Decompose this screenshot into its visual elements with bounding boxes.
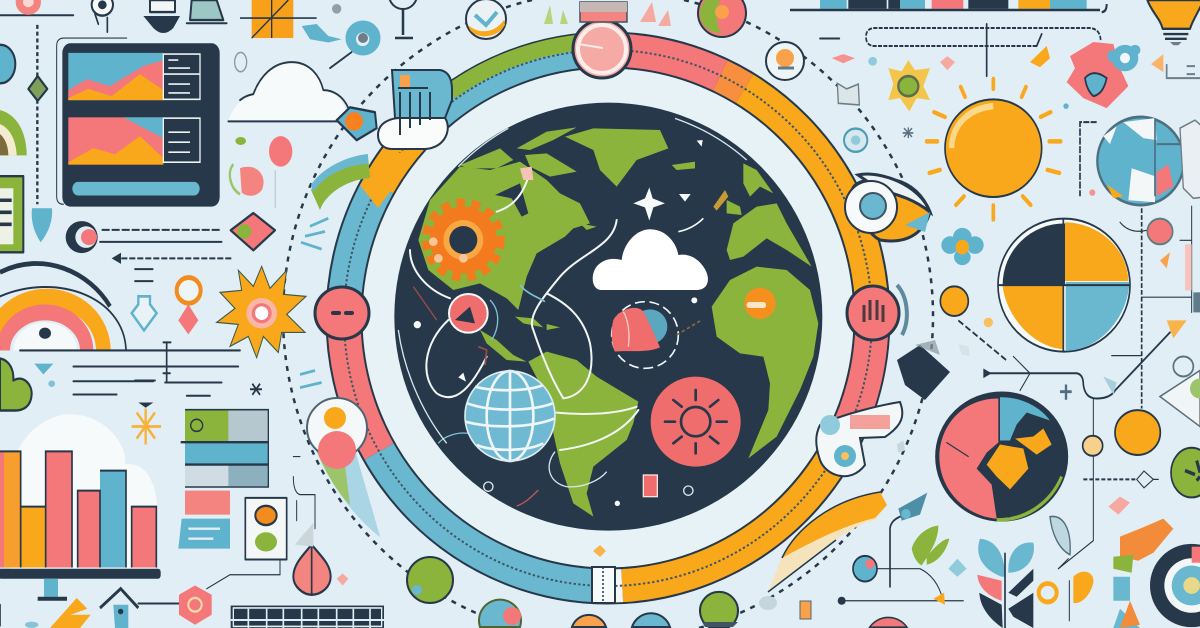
- green disc: [1171, 448, 1200, 497]
- orange gear: [426, 203, 501, 277]
- flask and pin icons: [132, 278, 201, 334]
- balloons: [230, 136, 292, 208]
- pencil: [759, 492, 887, 610]
- node with lines: [66, 221, 232, 281]
- panel: right side illustrations: [790, 0, 1200, 628]
- ring segments: [335, 41, 881, 595]
- small green rainbow: [0, 110, 27, 155]
- flower blob: [1067, 42, 1140, 108]
- star and small marks: [414, 140, 703, 506]
- blue marker: [34, 364, 55, 387]
- orange star icon: [57, 384, 262, 445]
- blue flower: [941, 228, 984, 265]
- padlock and tag: [1160, 356, 1200, 427]
- pink accent: [897, 344, 1130, 515]
- top medallion right: [698, 0, 746, 37]
- red drop: [293, 523, 348, 595]
- top dial node: [573, 20, 631, 78]
- orbit badge: [766, 42, 804, 80]
- red hexagon: [179, 586, 212, 625]
- small accents: [832, 46, 1095, 196]
- bottom medallions: [407, 557, 811, 627]
- orange tag on ring: [360, 150, 420, 208]
- inner pale disc: [359, 67, 857, 569]
- small red lens: [449, 294, 488, 333]
- world pie two: [936, 392, 1067, 521]
- cloud outline: [228, 62, 348, 121]
- orange sun spot: [744, 288, 776, 319]
- small sun: [888, 60, 930, 111]
- rainbow leaf near ring: [311, 154, 370, 210]
- bottom separator: [592, 545, 615, 603]
- top medallion left: [466, 0, 506, 39]
- hudson bay: [495, 183, 528, 217]
- bottom marks: [413, 287, 693, 506]
- panel: left side illustrations: [0, 0, 384, 628]
- flower bud icon: [231, 213, 275, 250]
- dashed connector: [820, 24, 1101, 76]
- green cloud: [0, 358, 32, 411]
- eye icon: [845, 174, 930, 241]
- world pie: [1097, 117, 1200, 205]
- sun gear: [217, 266, 306, 358]
- wire globe: [465, 371, 555, 461]
- blue blob, dashed line and diamond: [0, 25, 52, 242]
- dashed orbit piece and bracket: [1080, 122, 1097, 196]
- globe: [394, 103, 822, 531]
- leaves and branch: [838, 493, 967, 605]
- top small shapes: [349, 0, 671, 52]
- top left icons: [0, 0, 377, 72]
- big sun: [927, 79, 1061, 219]
- bar chart: [0, 414, 161, 601]
- dark diamond: [897, 340, 950, 400]
- server stack: [178, 410, 268, 549]
- arrow connector: [983, 320, 1187, 400]
- red sun disc: [651, 377, 741, 467]
- wiring lines: [73, 342, 238, 396]
- orange dot: [940, 286, 1007, 360]
- light bulb: [1147, 0, 1200, 78]
- solar panel: [231, 606, 384, 628]
- dark ocean disc: [394, 103, 822, 531]
- big orange circle: [1115, 410, 1160, 455]
- right side circuits: [1120, 206, 1200, 409]
- right node: [847, 286, 899, 340]
- building icon on ring: [378, 70, 452, 149]
- panel: central ring: [306, 0, 950, 627]
- ring outline: [344, 50, 872, 586]
- leaf book: [977, 539, 1034, 628]
- target flower: [1113, 519, 1200, 628]
- clasp icon: [816, 402, 902, 476]
- continents: [418, 127, 818, 517]
- top strip of boxes: [790, 0, 1107, 12]
- white cloud: [593, 229, 708, 290]
- small flowers: [1039, 516, 1093, 621]
- green book: [0, 176, 23, 252]
- heart planet: [612, 302, 702, 368]
- rainbow gauge: [0, 263, 240, 350]
- wifi arcs by right node: [897, 285, 907, 335]
- satellite gem: [337, 107, 377, 140]
- dashboard screen: [57, 38, 220, 207]
- bubble with comet: [306, 398, 380, 537]
- quadrant pie chart: [998, 218, 1130, 352]
- dashed orbit around the ring: [283, 0, 933, 628]
- lightning and birdhouse: [0, 589, 180, 628]
- route lines: [398, 118, 747, 487]
- bottom red circle: [870, 617, 907, 627]
- blue lines: [300, 218, 328, 388]
- left node: [315, 287, 369, 339]
- node line: [1058, 398, 1158, 569]
- traffic light: [207, 457, 315, 589]
- orange pin: [713, 190, 728, 211]
